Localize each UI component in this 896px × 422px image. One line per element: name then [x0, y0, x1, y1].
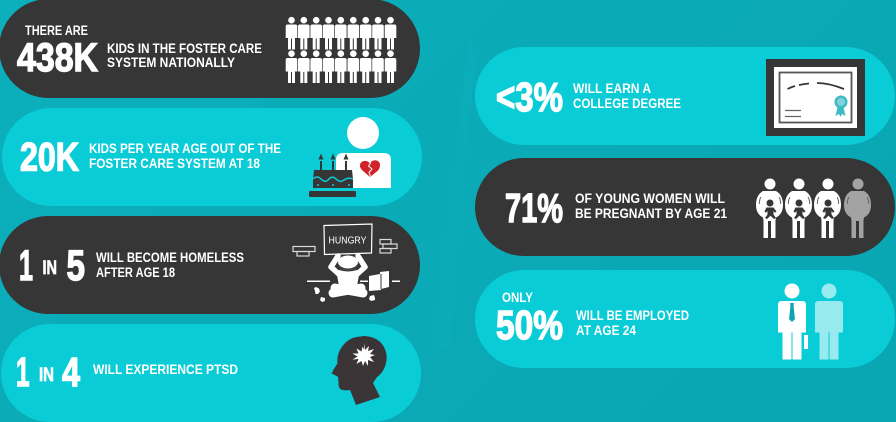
panel: college degree [475, 47, 895, 145]
stat: 1 in 4: IN [39, 365, 54, 386]
panel: 1 in 4 PTSD [1, 324, 421, 422]
description: PTSD: WILL EXPERIENCE PTSD [93, 362, 238, 377]
description: kids in foster care: KIDS IN THE FOSTER CARE [107, 41, 262, 56]
panel: pregnant by 21 [475, 158, 895, 256]
panel: 1 in 5 homeless [0, 216, 420, 314]
description: college: WILL EARN A [573, 81, 651, 96]
label: only: ONLY [502, 290, 533, 305]
icon: homeless figure with sign: HUNGRY [328, 236, 367, 246]
description: pregnant: OF YOUNG WOMEN WILL [575, 191, 725, 206]
icon: pregnant women [756, 178, 871, 238]
stat: 71 percent: 71% [505, 185, 563, 231]
description: homeless: AFTER AGE 18 [96, 265, 175, 280]
panel: 438K kids in foster care [0, 0, 420, 98]
icon: employed man with tie [778, 284, 808, 360]
stat: 50 percent: 50% [496, 302, 563, 348]
stat: 1 in 4: 4 [62, 349, 80, 395]
stat: 1 in 5: IN [42, 258, 57, 279]
description: employed: WILL BE EMPLOYED [576, 308, 689, 323]
stat: 438K: 438K [17, 36, 98, 80]
panel: 20K age out [2, 108, 422, 206]
description: employed: AT AGE 24 [576, 323, 636, 338]
icon: homeless figure with sign [293, 224, 400, 302]
stat: less than 3 percent: <3% [496, 74, 563, 120]
description: homeless: WILL BECOME HOMELESS [96, 250, 244, 265]
icon: unemployed person [815, 284, 843, 360]
icon: framed diploma [766, 59, 865, 136]
description: college: COLLEGE DEGREE [573, 96, 681, 111]
description: kids in foster care: SYSTEM NATIONALLY [107, 55, 235, 70]
description: pregnant: BE PREGNANT BY AGE 21 [575, 206, 727, 221]
stat: 1 in 5 [19, 242, 85, 290]
icon: person with broken heart and cake [309, 117, 391, 197]
description: age out: KIDS PER YEAR AGE OUT OF THE [89, 141, 281, 156]
stat: 1 in 4 [16, 349, 80, 395]
icon: head with burst [332, 336, 387, 405]
label: there are: THERE ARE [25, 23, 88, 38]
panel: employed [475, 270, 895, 368]
stat: 1 in 5: 5 [66, 242, 85, 290]
stat: 20K: 20K [20, 136, 79, 180]
description: age out: FOSTER CARE SYSTEM AT 18 [89, 156, 260, 171]
icon: grid of people [286, 17, 396, 83]
stat: 1 in 4: 1 [16, 349, 30, 395]
stat: 1 in 5: 1 [19, 242, 33, 290]
